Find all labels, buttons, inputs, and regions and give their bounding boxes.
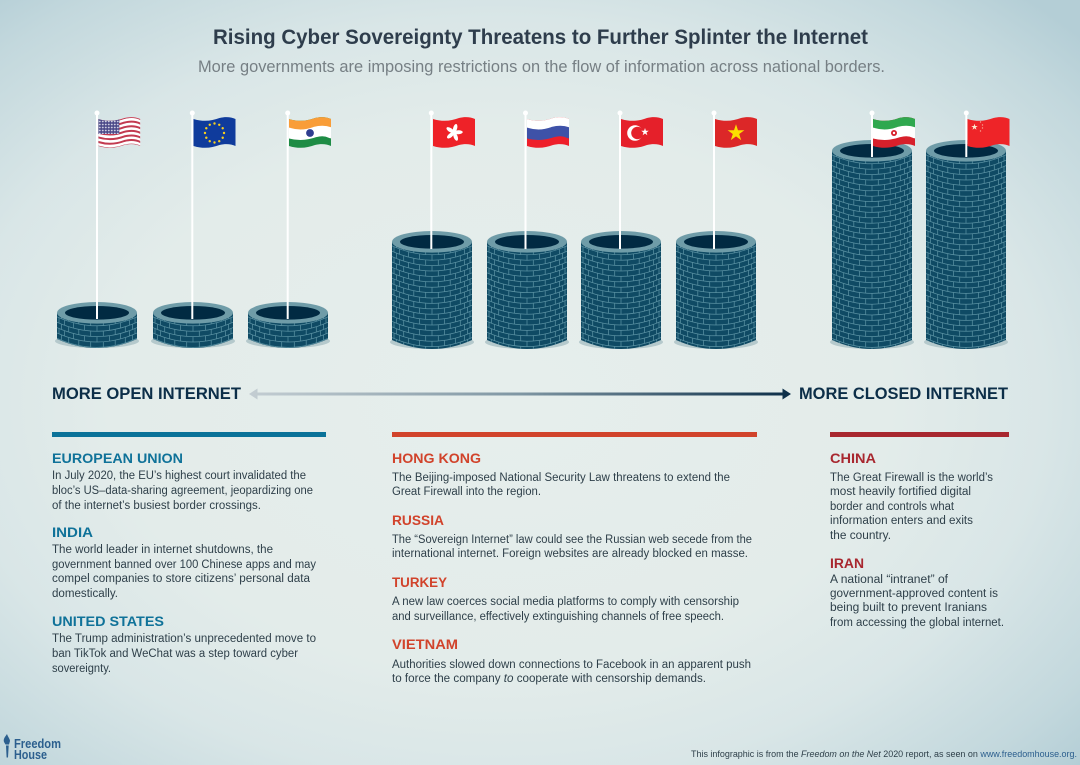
text block: India: compel companies to store citizens’ personal data (52, 573, 311, 585)
axis label: more open internet: MORE OPEN INTERNET (52, 385, 241, 403)
text block: India: INDIA (52, 525, 93, 540)
text block: United States (52, 614, 316, 675)
flag: China (968, 117, 1010, 148)
text block: Russia: The “Sovereign Internet” law could see the Russian web secede from the (392, 534, 752, 546)
tower: India (246, 110, 331, 348)
flag: Iran (873, 117, 915, 148)
subtitle: More governments are imposing restrictions on the flow of information across national borders. (198, 57, 885, 76)
text block: India: government banned over 100 Chinese apps and may (52, 559, 316, 571)
text block: China: information enters and exits (830, 515, 973, 527)
text block: Iran: A national “intranet” of (830, 574, 949, 586)
flag: European Union (194, 117, 236, 148)
logo: Freedom House (4, 734, 61, 762)
panel: middle countries (392, 432, 757, 685)
text block: India (52, 525, 316, 600)
text block: Turkey (392, 575, 739, 623)
logo: Freedom House: House (14, 748, 47, 762)
text block: Turkey: and surveillance, effectively extinguishing channels of free speech. (392, 611, 724, 623)
text block: Iran (830, 556, 1004, 629)
text block: European Union: In July 2020, the EU’s highest court invalidated the (52, 470, 306, 482)
text block: China: CHINA (830, 451, 876, 466)
tower: Vietnam (674, 110, 758, 349)
flag: Hong Kong (433, 117, 475, 148)
text block: Vietnam: Authorities slowed down connections to Facebook in an apparent push (392, 659, 751, 671)
text block: Vietnam (392, 637, 751, 685)
text block: Russia (392, 513, 752, 560)
tower: United States (55, 110, 140, 348)
text block: European Union (52, 451, 313, 512)
text block: China: border and controls what (830, 501, 955, 513)
panel: more open countries (52, 432, 326, 675)
text block: European Union: bloc’s US–data-sharing agreement, jeopardizing one (52, 485, 313, 497)
text block: Hong Kong: HONG KONG (392, 451, 481, 466)
text block: Hong Kong: The Beijing-imposed National Security Law threatens to extend the (392, 472, 730, 484)
flag: Turkey (621, 117, 663, 148)
text block: Iran: being built to prevent Iranians (830, 602, 987, 614)
text block: China: most heavily fortified digital (830, 486, 971, 498)
text block: Turkey: TURKEY (392, 575, 447, 590)
arrow: openness spectrum (249, 388, 791, 400)
tower: Iran (830, 110, 919, 360)
footer source note: This infographic is from the Freedom on the Net 2020 report, as seen on www.freedomhouse.org. (691, 749, 1077, 759)
text block: Iran: from accessing the global internet. (830, 617, 1004, 629)
text block: Russia: RUSSIA (392, 513, 444, 528)
text block: Hong Kong (392, 451, 730, 498)
text block: Vietnam: VIETNAM (392, 637, 458, 652)
text block: United States: UNITED STATES (52, 614, 164, 629)
tower: China (924, 110, 1010, 360)
text block: Iran: government-approved content is (830, 588, 998, 600)
tower: Russia (485, 110, 569, 349)
flag: Russia (527, 117, 569, 148)
title: Rising Cyber Sovereignty Threatens to Further Splinter the Internet (213, 26, 868, 49)
tower: Hong Kong (390, 110, 475, 349)
flag: United States (98, 117, 140, 148)
text block: India: The world leader in internet shutdowns, the (52, 544, 273, 556)
flag: India (289, 117, 331, 148)
text block: European Union: of the internet’s busiest border crossings. (52, 500, 261, 512)
axis label: more closed internet: MORE CLOSED INTERNET (799, 385, 1008, 403)
text block: China (830, 451, 993, 542)
logo: Freedom House: Freedom (14, 737, 61, 751)
tower: European Union (151, 110, 236, 348)
text block: China: the country. (830, 530, 891, 542)
flag: Vietnam (715, 117, 757, 148)
text block: European Union: EUROPEAN UNION (52, 451, 183, 466)
text block: United States: sovereignty. (52, 663, 111, 675)
panel: most closed countries (830, 432, 1009, 629)
text block: India: domestically. (52, 588, 118, 600)
text block: United States: The Trump administration’s unprecedented move to (52, 633, 316, 645)
text block: Turkey: A new law coerces social media platforms to comply with censorship (392, 596, 739, 608)
tower: Turkey (579, 110, 663, 349)
text block: Vietnam: to force the company to cooperate with censorship demands. (392, 673, 706, 685)
text block: China: The Great Firewall is the world’s (830, 472, 993, 484)
text block: United States: ban TikTok and WeChat was a step toward cyber (52, 648, 298, 660)
text block: Iran: IRAN (830, 556, 864, 571)
text block: Russia: international internet. Foreign websites are already blocked en masse. (392, 548, 748, 560)
text block: Hong Kong: Great Firewall into the region. (392, 486, 541, 498)
